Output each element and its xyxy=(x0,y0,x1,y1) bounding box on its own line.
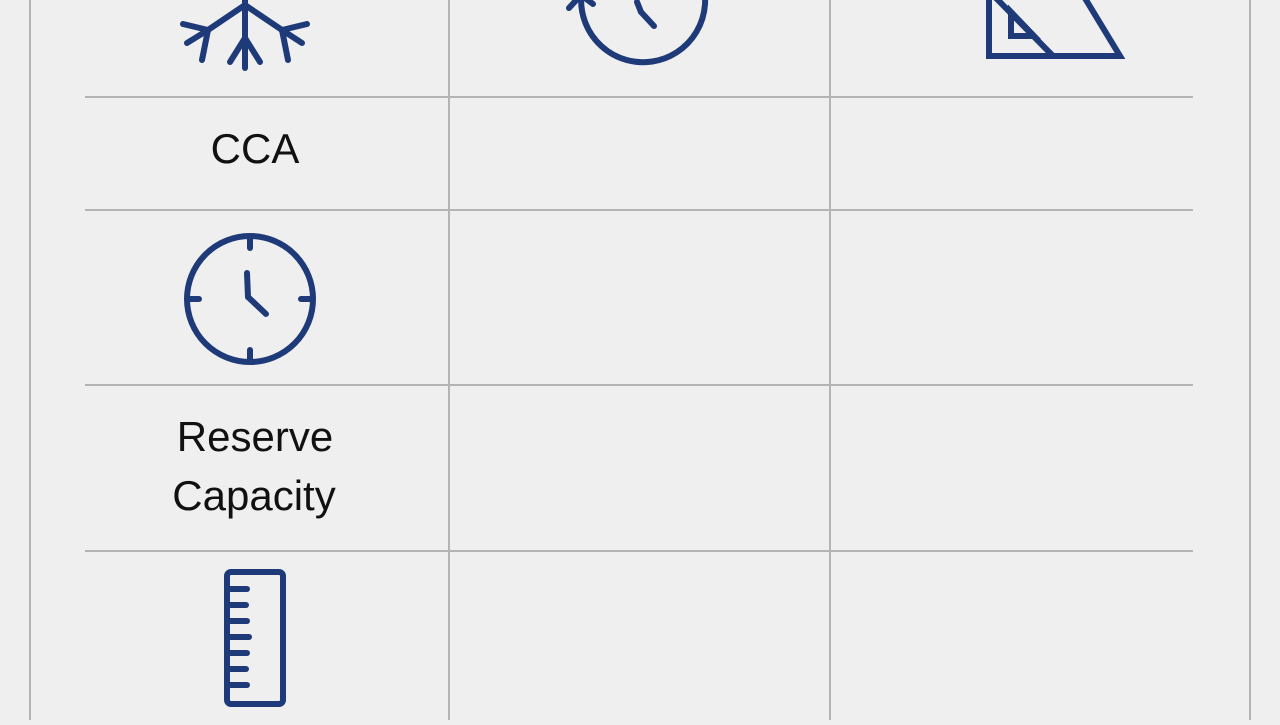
icon: ruler xyxy=(227,572,283,704)
label: Reserve Capacity: Capacity xyxy=(172,472,336,519)
icon: snowflake xyxy=(183,0,307,68)
icon: clock xyxy=(187,236,313,362)
label: CCA: CCA xyxy=(211,125,299,172)
icon: set square xyxy=(989,0,1120,56)
label: Reserve Capacity: Reserve xyxy=(177,413,333,460)
label: Reserve Capacity xyxy=(172,413,336,519)
icon: clock with arrow xyxy=(569,0,705,62)
